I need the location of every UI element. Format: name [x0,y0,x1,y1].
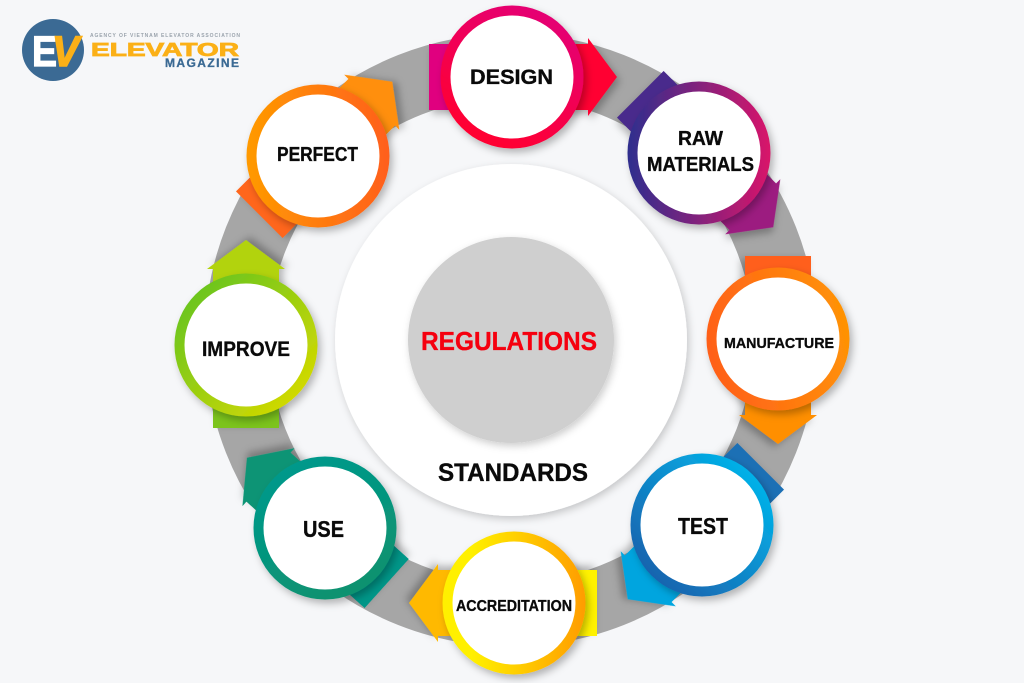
ring: manufacture [706,268,850,410]
step: perfect [232,54,420,242]
ring: accreditation [442,532,586,674]
standards label: STANDARDS [438,459,588,487]
label: accreditation: ACCREDITATION [456,598,572,615]
logo monogram V: V [52,28,82,76]
logo monogram E: E [32,28,57,76]
ring: test [630,454,774,596]
label: improve: IMPROVE [202,338,290,361]
step: use [221,429,413,613]
arrow: accreditation [409,564,597,642]
logo badge circle [22,19,84,81]
logo wordmark: ELEVATOR [91,40,239,60]
logo: Elevator Magazine [22,19,240,81]
ring: use [254,456,396,600]
ring: perfect [246,84,390,228]
arrow: raw materials [613,67,801,255]
step: test [600,439,788,627]
step: improve [174,240,318,428]
step: design [429,6,617,148]
logo subtitle: MAGAZINE [165,56,239,70]
label: manufacture: MANUFACTURE [724,335,834,352]
step: raw materials [613,67,801,255]
arrow: design [429,38,617,116]
label: use: USE [303,516,344,542]
label: perfect: PERFECT [277,144,358,166]
label: design: DESIGN [470,66,553,89]
ring: design [440,6,584,148]
ring: raw materials [628,82,770,224]
regulations label: REGULATIONS [421,326,597,356]
step: raw materials: MATERIALS [647,154,754,176]
step: manufacture [706,256,850,444]
centre panel: standards [335,164,687,516]
white standards disc [335,164,687,516]
arrow: improve [207,240,285,428]
step: accreditation [409,532,597,674]
label: raw materials: RAW [678,128,723,150]
logo tagline: AGENCY OF VIETNAM ELEVATOR ASSOCIATION [90,33,240,39]
arrow: perfect [232,54,420,242]
arrow: test [600,439,788,627]
grey regulations disc [408,237,614,443]
ring: improve [174,274,318,416]
arrow: use [221,429,413,613]
grey cycle ring [236,66,786,614]
arrow: manufacture [739,256,817,444]
label: test: TEST [678,513,728,539]
